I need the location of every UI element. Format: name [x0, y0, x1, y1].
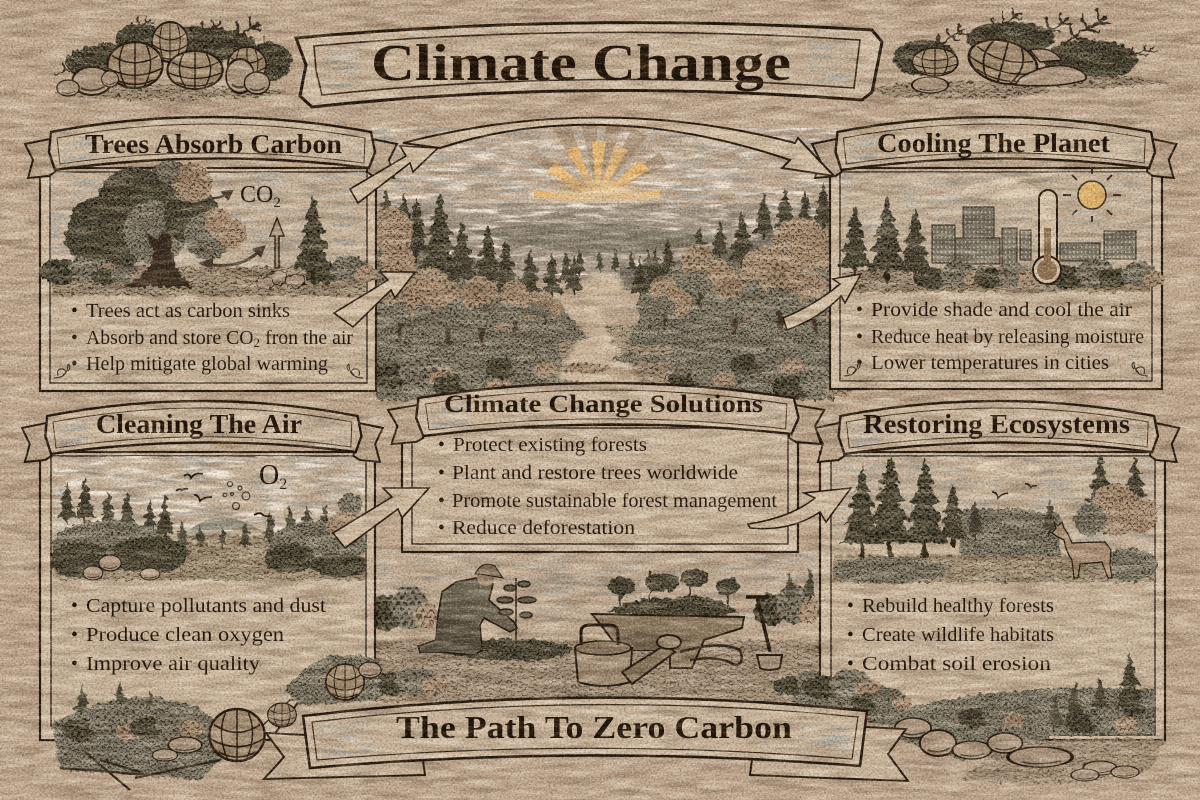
bullets: • — [438, 435, 445, 456]
icon: upward CO2 arrow — [270, 218, 284, 268]
panel: cleaning the air — [40, 452, 375, 740]
bullets: • — [71, 328, 78, 349]
arrow: carbon panel to forest, upper — [350, 146, 438, 203]
heading ribbon: climate change solutions: Climate Change Solutions — [444, 391, 763, 418]
icon: kneeling gardener — [418, 564, 517, 655]
icon: sapling — [497, 578, 536, 645]
icon: watering can — [575, 625, 681, 686]
bullets: Plant and restore trees worldwide — [452, 463, 738, 484]
bullets: Protect existing forests — [453, 435, 647, 456]
top-right ornament: cones and stones — [870, 9, 1170, 99]
bullets: Combat soil erosion — [862, 654, 1051, 675]
arrow: solutions to ecosystems — [748, 488, 851, 529]
bullets: Reduce heat by releasing moisture — [871, 327, 1144, 348]
bullets: • — [847, 625, 854, 646]
panel: cooling the planet — [830, 168, 1165, 389]
bullets: 2 — [254, 335, 260, 350]
bullets — [438, 435, 778, 539]
bullets: • — [847, 596, 854, 617]
bullets: Promote sustainable forest management — [452, 491, 778, 512]
bullets: • — [71, 301, 78, 322]
bullets: • — [856, 327, 863, 348]
CO2 label: CO — [240, 182, 273, 208]
top-left ornament: pine cones and leaves — [55, 15, 292, 100]
arrow: air panel to solutions — [333, 488, 429, 548]
title banner — [296, 23, 882, 107]
bullets: Lower temperatures in cities — [871, 353, 1109, 374]
bullets — [71, 596, 327, 675]
panel: trees absorb carbon — [39, 160, 378, 391]
bottom-right ornament: stones and pines — [790, 653, 1165, 783]
bullets: • — [71, 625, 78, 646]
icon: soil mound — [448, 639, 572, 661]
bottom-left ornament: pine cone and herbs — [52, 654, 381, 790]
title: Climate Change — [371, 35, 791, 92]
icon: shovel — [746, 597, 782, 670]
illustration: tree line with birds and oxygen — [50, 456, 368, 580]
bullets: fron the air — [260, 328, 353, 349]
bullets: • — [438, 463, 445, 484]
central forest landscape — [366, 120, 852, 400]
far treeline — [558, 249, 654, 284]
icon: exchange arrow — [198, 245, 266, 270]
bullets: • — [438, 518, 445, 539]
heading ribbon: restoring ecosystems: Restoring Ecosystems — [863, 409, 1130, 439]
O2 label: O — [259, 460, 279, 491]
bullets: • — [71, 596, 78, 617]
bullets: Rebuild healthy forests — [862, 596, 1054, 617]
heading ribbon: cleaning the air: Cleaning The Air — [96, 409, 302, 439]
bullets: Produce clean oxygen — [86, 625, 284, 646]
bullets: Absorb and store CO — [86, 328, 251, 349]
heading ribbon: cooling the planet — [812, 117, 1177, 178]
winding path — [545, 272, 650, 398]
bullets: Provide shade and cool the air — [871, 300, 1133, 321]
bullets — [847, 596, 1054, 675]
bullets: • — [856, 353, 863, 374]
bullets — [71, 301, 353, 375]
heading ribbon: climate change solutions — [388, 383, 824, 444]
bullets: Capture pollutants and dust — [86, 596, 327, 617]
bullets: Improve air quality — [86, 654, 260, 675]
bullets: Help mitigate global warming — [86, 354, 328, 375]
bullets: • — [856, 300, 863, 321]
icon: deer — [1052, 522, 1112, 578]
foreground meadow — [366, 325, 852, 400]
sky and clouds — [372, 128, 837, 253]
O2 label: 2 — [279, 476, 287, 493]
heading ribbon: trees absorb carbon: Trees Absorb Carbon — [85, 129, 342, 159]
icon: oxygen bubbles — [223, 482, 250, 510]
bullets: • — [438, 491, 445, 512]
bottom banner — [264, 698, 908, 781]
icon: planter box — [592, 569, 744, 668]
icon: rising sun — [527, 120, 668, 222]
icon: leaf-out arrow — [212, 191, 232, 199]
city skyline — [932, 207, 1136, 265]
arrow: top sweeping arc — [403, 118, 834, 176]
heading ribbon: trees absorb carbon — [25, 117, 397, 178]
illustration: city, trees, thermometer and sun — [838, 168, 1165, 292]
bullets: Create wildlife habitats — [862, 625, 1054, 646]
bullets: • — [847, 654, 854, 675]
illustration: oak, pine and CO2 cycle — [39, 160, 378, 296]
gardener scene — [365, 550, 840, 702]
icon: thermometer — [1033, 190, 1061, 284]
distant hills — [376, 203, 834, 290]
right forest — [625, 182, 846, 345]
arrow: carbon panel to forest, lower — [334, 272, 415, 327]
bullets: Reduce deforestation — [452, 518, 635, 539]
arrow: forest to cooling panel — [783, 274, 861, 330]
banner title: The Path To Zero Carbon — [396, 709, 792, 745]
left forest — [366, 190, 590, 345]
CO2 label: 2 — [273, 195, 281, 211]
path-side shrubs — [546, 339, 666, 390]
icon: birds — [176, 474, 272, 516]
panel: restoring ecosystems — [820, 452, 1165, 740]
heading ribbon: cleaning the air — [22, 401, 383, 462]
bullets — [856, 300, 1144, 374]
heading ribbon: restoring ecosystems — [815, 401, 1180, 462]
heading ribbon: cooling the planet: Cooling The Planet — [877, 128, 1110, 158]
bullets: • — [71, 654, 78, 675]
bullets: • — [71, 354, 78, 375]
icon: sun — [1063, 168, 1121, 222]
bullets: Trees act as carbon sinks — [86, 301, 290, 322]
illustration: forest and deer — [832, 454, 1158, 584]
icon: birds — [992, 484, 1037, 498]
panel: climate change solutions — [402, 425, 798, 552]
